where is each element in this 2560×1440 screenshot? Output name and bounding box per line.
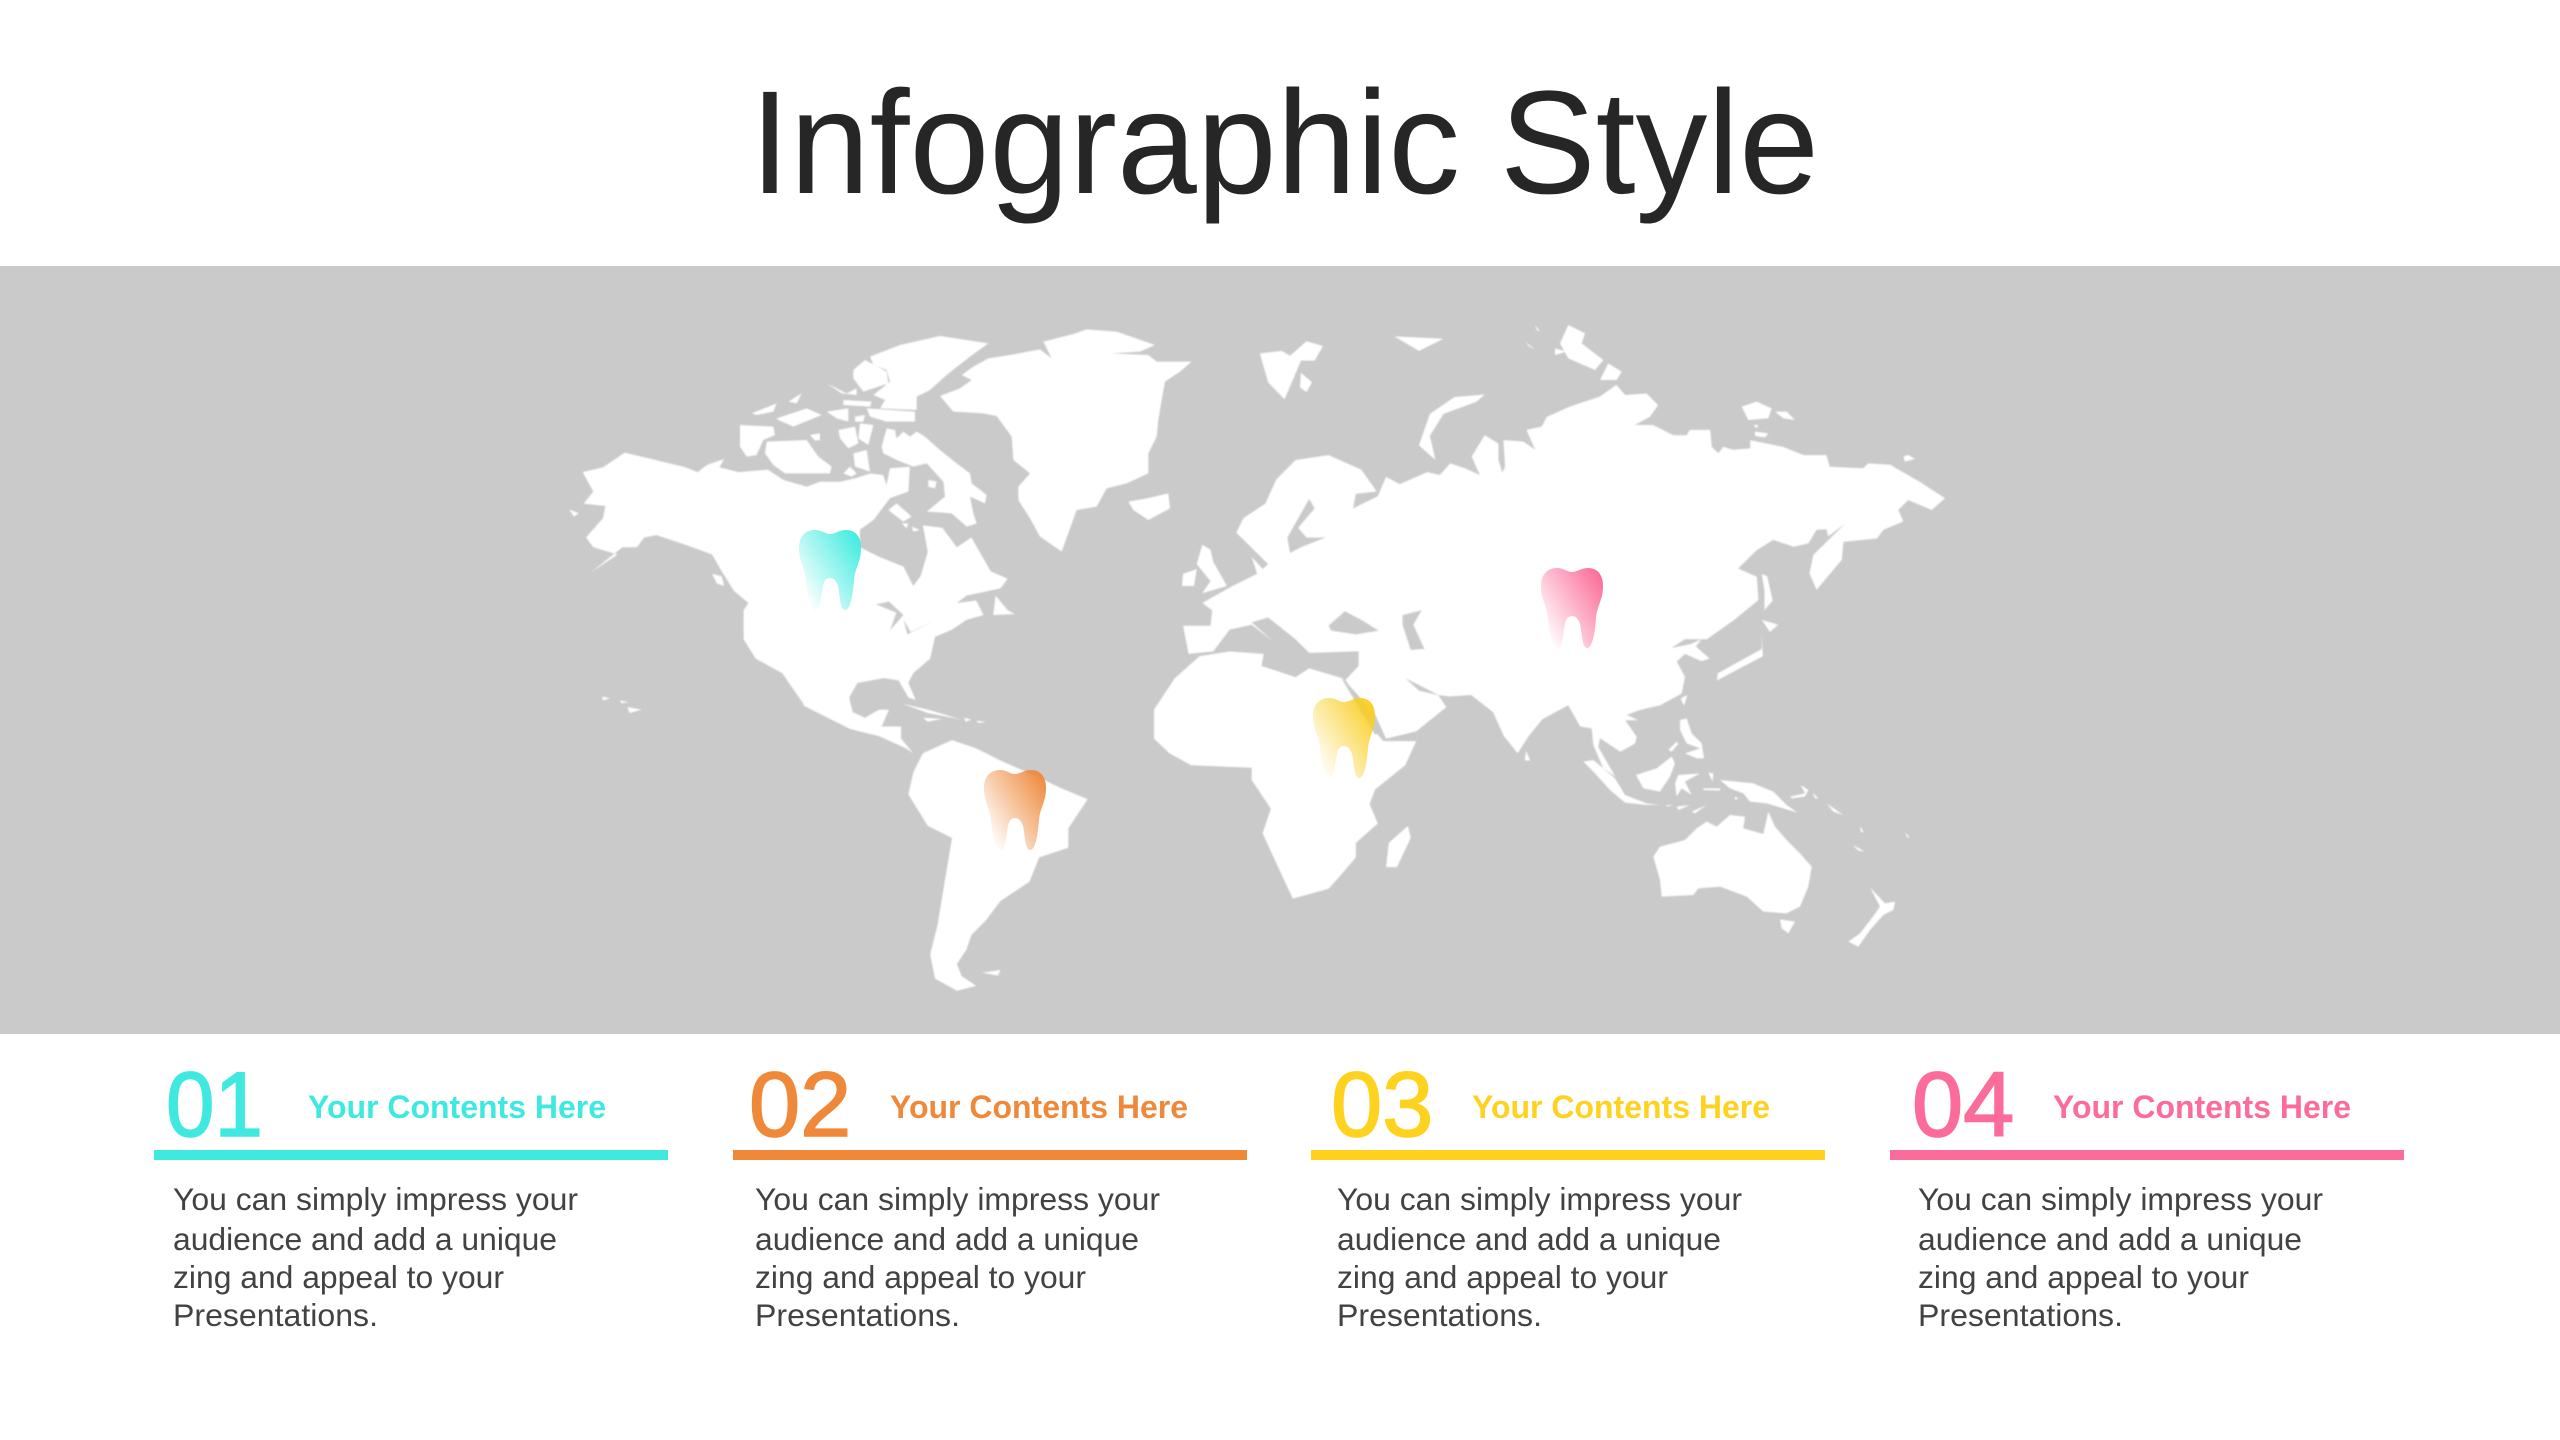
Caribbean and Hawaii islands (602, 696, 986, 723)
panel: map band (0, 266, 2560, 1034)
description 04: You can simply impress your (1918, 1181, 2323, 1217)
South America (908, 740, 1088, 991)
map: Russian arctic islands (1525, 325, 1915, 462)
rule 03 (1311, 1150, 1825, 1160)
Indonesia and Philippines (1583, 695, 1720, 813)
Newfoundland and Aleutian islets (569, 509, 1015, 615)
Hudson Bay islands (888, 480, 937, 532)
Australia (1653, 812, 1812, 913)
New Zealand (1848, 887, 1895, 947)
number 04: 04 (1912, 1054, 2014, 1156)
panel: item 03 (1311, 1054, 1825, 1333)
Baffin Island (882, 428, 987, 527)
icon: orange tooth (984, 770, 1046, 850)
New Guinea (1720, 780, 1797, 813)
description 01 (173, 1181, 578, 1333)
Iceland (1128, 493, 1170, 520)
panel: item 02 (733, 1054, 1247, 1333)
description 04 (1918, 1181, 2323, 1333)
Pacific islands (1735, 785, 1910, 852)
Ellesmere and Devon islands (853, 336, 988, 422)
description 03: You can simply impress your (1337, 1181, 1742, 1217)
icon: teal tooth (799, 530, 861, 610)
Africa (1154, 651, 1416, 899)
number 01: 01 (166, 1054, 263, 1156)
description 03: audience and add a unique (1337, 1221, 1721, 1257)
icon: pink tooth (1541, 568, 1603, 648)
description 01: audience and add a unique (173, 1221, 557, 1257)
Japan and Sakhalin (1717, 574, 1778, 680)
map: Americas (569, 453, 1088, 991)
description 03: zing and appeal to your (1337, 1259, 1668, 1295)
Britain and Ireland (1182, 545, 1227, 593)
panel: item 04 (1890, 1054, 2404, 1333)
description 02 (755, 1181, 1160, 1333)
description 04: audience and add a unique (1918, 1221, 2302, 1257)
description 01: Presentations. (173, 1297, 378, 1333)
heading 04: Your Contents Here (2053, 1089, 2351, 1125)
description 01: zing and appeal to your (173, 1259, 504, 1295)
title: Infographic Style (750, 61, 1819, 225)
rule 02 (733, 1150, 1247, 1160)
map: Southeast Asia and Oceania (1583, 695, 1910, 947)
Great Lakes (876, 601, 934, 634)
Eurasia (1183, 385, 1945, 776)
map: Greenland and Canadian Arctic (740, 329, 1192, 552)
icon: yellow tooth (1313, 698, 1375, 778)
rule 04 (1890, 1150, 2404, 1160)
heading 03: Your Contents Here (1472, 1089, 1770, 1125)
number 03: 03 (1331, 1054, 1433, 1156)
map: Eurasia and Africa (1154, 336, 1945, 899)
inland seas (1287, 499, 1439, 735)
North America (583, 453, 1008, 753)
Gulf of California (780, 673, 804, 706)
panel: item 01 (154, 1054, 668, 1333)
description 02: zing and appeal to your (755, 1259, 1086, 1295)
heading 02: Your Contents Here (890, 1089, 1188, 1125)
Arctic archipelago (740, 383, 873, 477)
Greenland (940, 329, 1192, 552)
Madagascar and Sri Lanka (1386, 751, 1530, 867)
number 02: 02 (749, 1054, 851, 1156)
heading 01: Your Contents Here (308, 1089, 606, 1125)
Tasmania (1780, 919, 1795, 933)
rule 01 (154, 1150, 668, 1160)
world map (569, 325, 1945, 991)
description 03 (1337, 1181, 1742, 1333)
description 02: Presentations. (755, 1297, 960, 1333)
description 03: Presentations. (1337, 1297, 1542, 1333)
description 02: You can simply impress your (755, 1181, 1160, 1217)
description 01: You can simply impress your (173, 1181, 578, 1217)
description 04: Presentations. (1918, 1297, 2123, 1333)
Svalbard, Novaya Zemlya, Franz Josef (1260, 336, 1485, 460)
description 04: zing and appeal to your (1918, 1259, 2249, 1295)
description 02: audience and add a unique (755, 1221, 1139, 1257)
